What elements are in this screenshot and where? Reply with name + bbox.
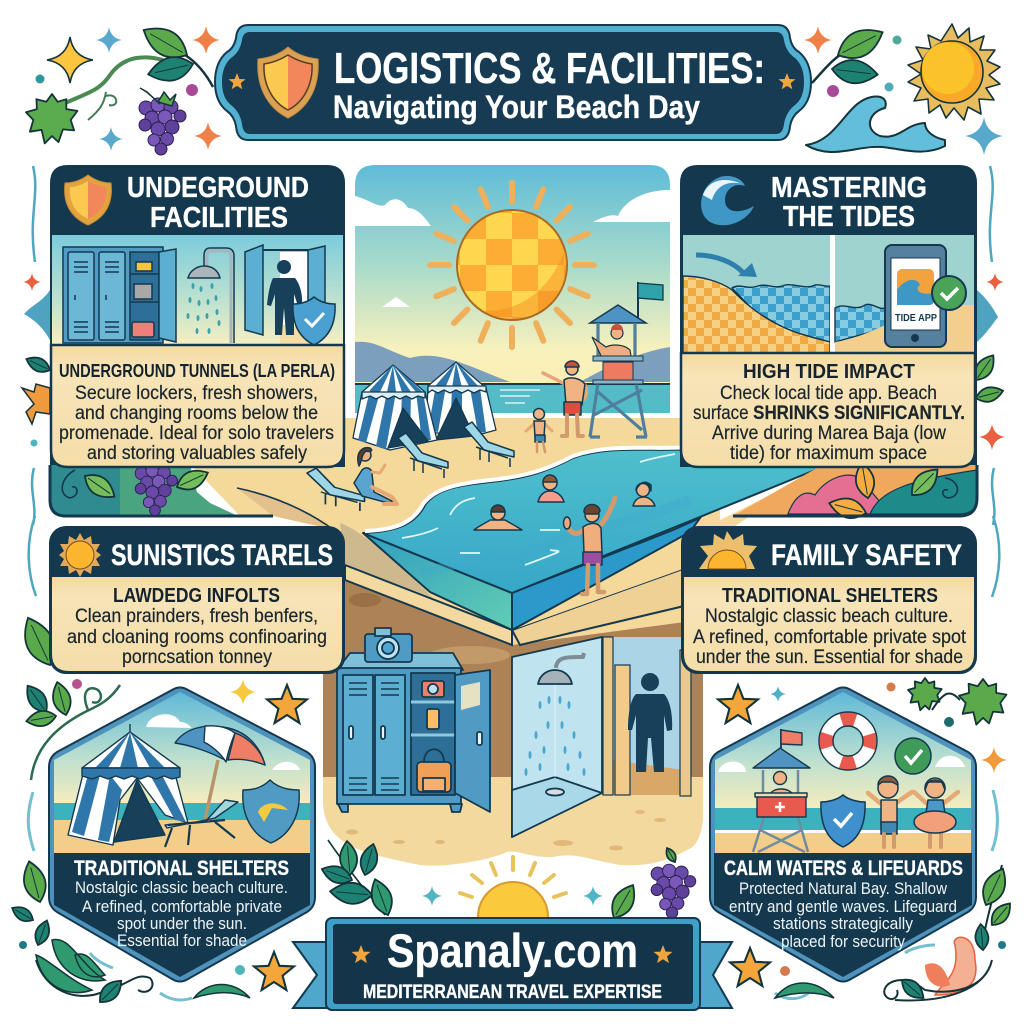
text block: A refined, comfortable private [82,897,282,916]
text block: Check local tide app. Beach [720,383,937,404]
icon: wave [701,176,754,225]
lifeguard tower with flag [590,282,663,437]
panel: underground facilities [50,165,345,516]
text block: and changing rooms below the [75,403,318,424]
striped tent, front [353,365,437,450]
heading: THE TIDES [783,201,915,233]
hexagon panel: traditional shelters [49,688,315,983]
icon: lifebuoy [819,712,877,770]
illustration: tent, umbrella, chair, shield [50,690,315,853]
lifeguard tower [753,729,810,852]
title text [333,44,765,125]
illustration: lockers, shower, changing room [52,235,343,346]
text block: TRADITIONAL SHELTERS [722,585,938,607]
child on beach [526,408,552,452]
icon: rising sun [699,531,757,569]
icon: blue shield [821,795,865,847]
sky with sea horizon [355,165,670,419]
lower-left decoration: vines, stars [9,679,307,1007]
hexagon panel: calm waters and lifeguards [710,688,976,982]
text block: under the sun. Essential for shade [696,647,963,668]
text block: CALM WATERS & LIFEUARDS [724,857,963,880]
beach sand [190,418,820,645]
text block: Protected Natural Bay. Shallow [739,879,948,898]
footer banner [293,918,732,1010]
text block: TRADITIONAL SHELTERS [74,857,289,880]
panel: central beach scene [190,165,820,866]
top-right decoration: sun, wave, leaves [804,21,1003,155]
heading: MASTERING [771,172,927,204]
text block: stations strategically [773,914,913,933]
text block: Clean prainders, fresh benfers, [75,606,318,627]
top-left decoration: vine, grapes, sparkles [26,19,222,155]
icon: header shield [65,175,111,225]
footer text: Spanaly.com [387,924,638,977]
person standing in shallow water [564,498,615,594]
side decorations: right wavy lines, sparkles, leaves [970,166,1005,597]
text block [724,857,963,951]
text block: surface SHRINKS SIGNIFICANTLY. [693,403,965,424]
text block: Nostalgic classic beach culture. [705,606,953,627]
heading [771,172,927,233]
heading: UNDEGROUND [127,172,309,204]
text block [52,577,342,671]
text block: and storing valuables safely [87,443,307,464]
text block [51,345,344,467]
underground brown wall [323,560,703,790]
illustration: high tide and tide app [683,235,974,353]
illustration: high tide and tide app: TIDE APP [895,312,937,324]
heading: FAMILY SAFETY [771,539,962,572]
illustration: sky, sea and sand [712,690,976,853]
title text: LOGISTICS & FACILITIES: [334,44,765,93]
footer text: MEDITERRANEAN TRAVEL EXPERTISE [363,982,662,1003]
swimmers in the sea [474,475,655,530]
text block: A refined, comfortable private spot [693,627,967,648]
icon: sun [59,533,101,577]
panel: sunistics tarels [49,526,345,674]
woman sitting on chair [354,448,397,504]
panel: mastering the tides [680,165,977,522]
title text: Navigating Your Beach Day [333,89,700,125]
text block: and cloaning rooms confinoaring [67,627,327,648]
icon: title shield [258,47,318,118]
text block: tide) for maximum space [730,443,927,464]
text block: porncsation tonney [122,647,272,668]
shower cabin [512,637,602,837]
sea water block [363,447,820,630]
panel: family safety [681,526,977,674]
footer text [363,924,662,1003]
heading [127,172,309,234]
bottom sun and ornaments above the footer [319,840,696,952]
icon: green check [895,738,931,774]
children with swim ring [868,776,958,847]
colourful foliage under panel [733,461,977,522]
changing room doorway with person [603,637,691,796]
sun with checker pattern and rays [430,183,594,347]
heading: SUNISTICS TARELS [111,539,333,572]
text block: Secure lockers, fresh showers, [75,383,318,404]
standing lifeguard [543,361,586,436]
text block: Nostalgic classic beach culture. [75,878,288,897]
text block: Essential for shade [117,931,247,950]
side decorations: left wavy lines, sparkles, leaves [16,166,62,670]
text block: HIGH TIDE IMPACT [743,361,915,383]
foliage with grapes under panel [50,464,273,516]
striped tent, rear [426,362,496,440]
text block: placed for security [781,932,905,951]
text block: Arrive during Marea Baja (low [712,423,946,444]
text block: spot under the sun. [117,914,247,933]
title banner [215,25,811,140]
text block: UNDERGROUND TUNNELS (LA PERLA) [59,360,335,381]
text block [74,857,289,950]
text block: entry and gentle waves. Lifeguard [729,897,957,916]
brown wall rock shading [349,578,676,664]
heading: FACILITIES [150,202,288,234]
text block [681,353,975,467]
lower-right decoration: vines, stars, flower [718,678,1015,1003]
lounge chairs [398,433,448,478]
text block: LAWDEDG INFOLTS [113,585,280,607]
text block: promenade. Ideal for solo travelers [59,423,334,444]
big open locker [337,628,490,812]
text block [684,577,974,671]
underground sand floor [323,777,703,866]
